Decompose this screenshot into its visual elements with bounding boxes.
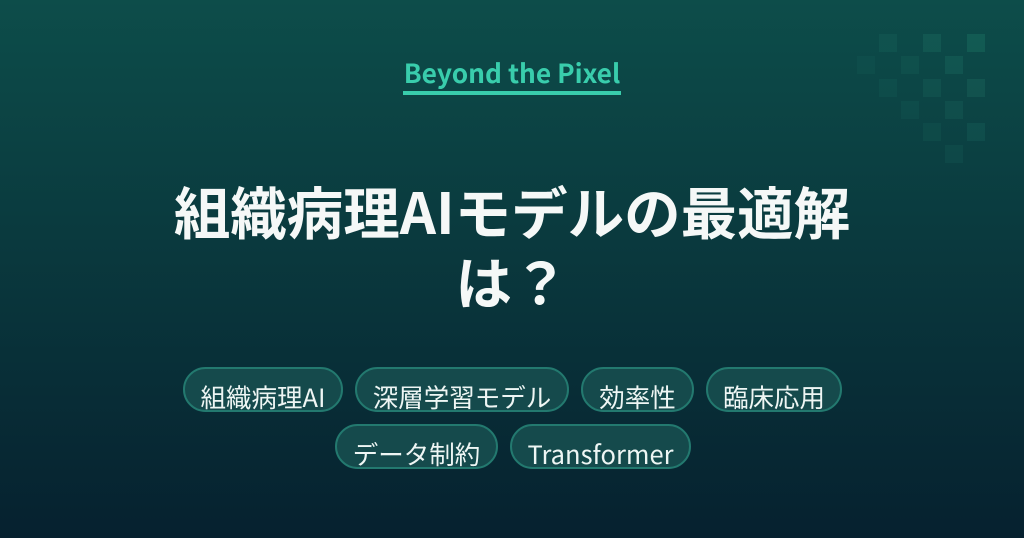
- chip: Transformer: [510, 424, 691, 469]
- chip: Transformer: Transformer: [528, 435, 674, 472]
- chip: データ制約: [335, 424, 498, 469]
- chip: 臨床応用: [706, 367, 842, 412]
- chip: データ制約: データ制約: [353, 435, 480, 472]
- decorative square pattern: [879, 34, 985, 141]
- chip: 臨床応用: 臨床応用: [723, 378, 825, 415]
- title: [174, 169, 850, 321]
- chip: 組織病理AI: 組織病理AI: [200, 378, 325, 415]
- title: 組織病理AIモデルの最適解: [174, 169, 850, 251]
- tag chips: [183, 367, 842, 472]
- chip: 効率性: 効率性: [599, 378, 676, 415]
- chip: 効率性: [581, 367, 694, 412]
- chip: 深層学習モデル: [355, 367, 569, 412]
- chip: 組織病理AI: [183, 367, 343, 412]
- brand label: Beyond the Pixel: Beyond the Pixel: [404, 52, 620, 91]
- chip: 深層学習モデル: 深層学習モデル: [373, 378, 551, 415]
- title: は？: [456, 239, 568, 321]
